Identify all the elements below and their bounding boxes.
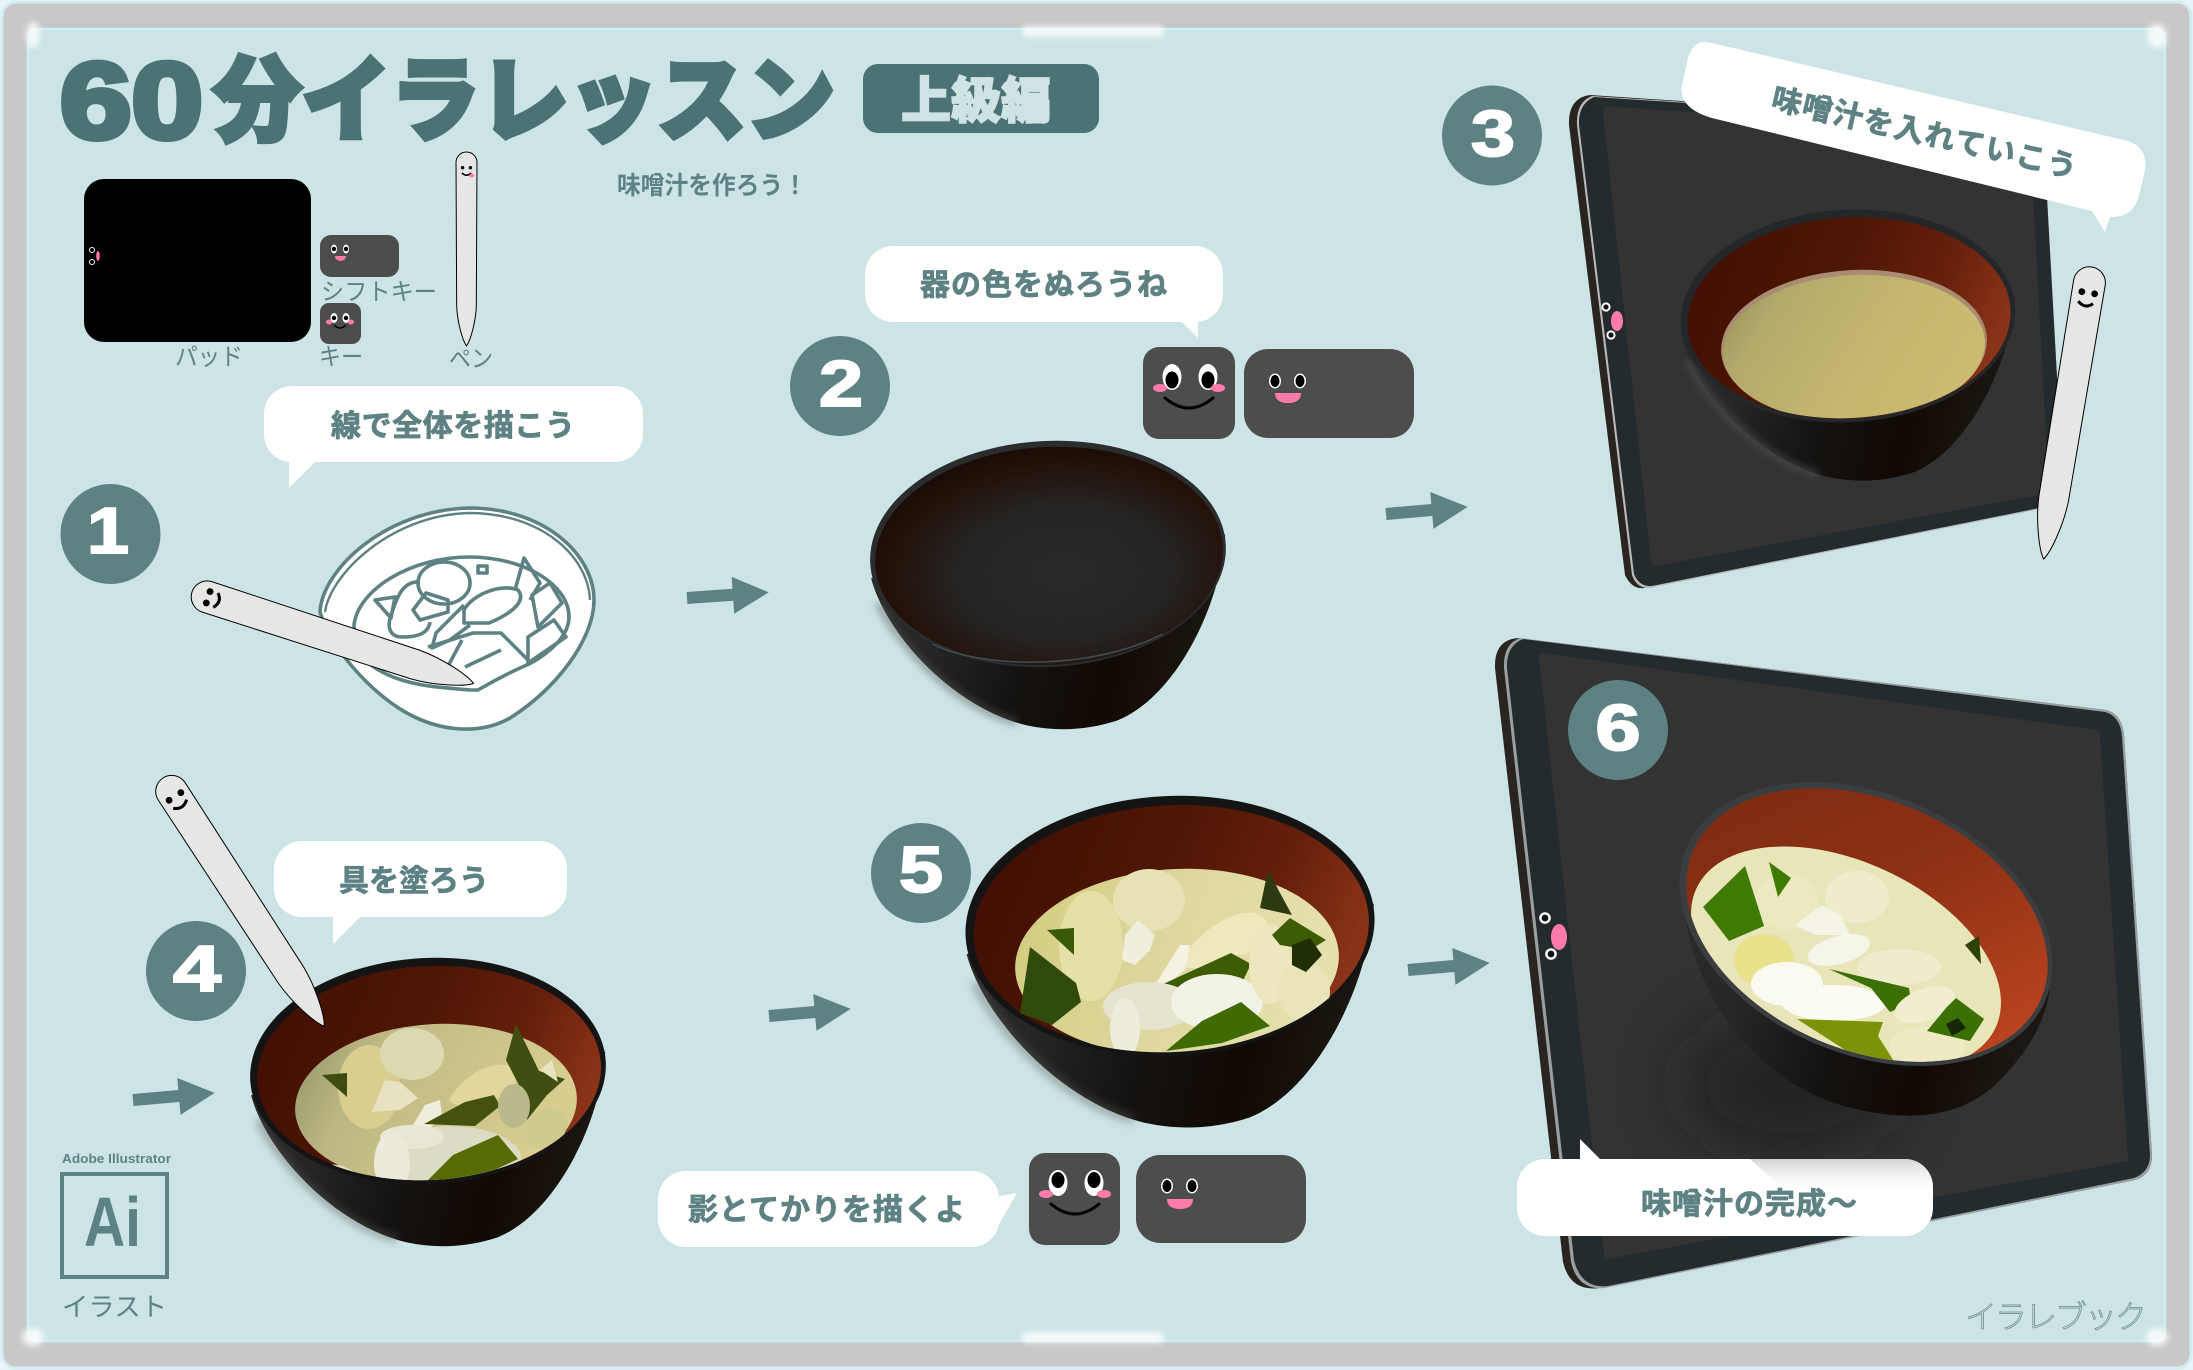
panel: step 4 (146, 769, 852, 1256)
bowl with shading (959, 786, 1385, 1139)
tablet face (1602, 303, 1623, 339)
Adobe Illustrator logo (62, 1151, 171, 1322)
panel: step 6 (1495, 638, 2152, 1288)
step number 3 (1442, 86, 1542, 186)
character legend (84, 152, 493, 373)
panel: step 2 (790, 246, 1469, 739)
logo caption: Adobe Illustrator (62, 1151, 171, 1166)
label: key: キー (319, 344, 363, 371)
title: 60 (60, 40, 203, 161)
speech bubble 6: 味噌汁の完成〜 (1641, 1188, 1857, 1221)
empty black bowl (864, 432, 1235, 739)
label: pad: パッド (175, 344, 243, 371)
tablet (1569, 95, 2064, 588)
icon: pen character (187, 577, 478, 699)
step number 6: 6 (1596, 691, 1640, 764)
badge: 上級編 (863, 64, 1099, 133)
step number 6 (1568, 680, 1668, 780)
step number 1: 1 (87, 494, 129, 567)
speech bubble 3 (1682, 42, 2145, 232)
icon: shift key character (1244, 349, 1414, 438)
speech bubble 5: 影とてかりを描くよ (688, 1194, 965, 1227)
label: shift key: シフトキー (321, 279, 437, 306)
icon: shift key character (1136, 1155, 1306, 1243)
panel: step 5 (658, 786, 1491, 1247)
label: pen: ペン (449, 346, 493, 373)
logo letters: Ai (84, 1183, 141, 1261)
step number 4 (146, 921, 246, 1021)
arrow (767, 991, 852, 1035)
panel: step 3 (131, 42, 2145, 1119)
step number 5 (871, 823, 971, 923)
speech bubble 2 (865, 246, 1223, 338)
title: 分イラレッスン (213, 51, 835, 153)
watermark: イラレブック (1965, 1299, 2147, 1335)
step number 4: 4 (173, 932, 221, 1005)
speech bubble 1 (264, 386, 643, 488)
title (60, 40, 835, 161)
speech bubble 5 (658, 1171, 1017, 1247)
arrow (686, 574, 770, 617)
icon: pen character (150, 769, 338, 1035)
speech bubble 3: 味噌汁を入れていこう (1768, 83, 2080, 185)
badge: 上級編: 上級編 (901, 73, 1051, 129)
speech bubble 6 (1517, 1139, 1933, 1236)
arrow (131, 1075, 216, 1119)
bowl with painted ingredients (244, 949, 615, 1256)
step number 2 (790, 336, 890, 436)
step number 2: 2 (819, 347, 863, 420)
icon: key character (1143, 347, 1235, 439)
tablet face (1540, 913, 1567, 959)
speech bubble 4: 具を塗ろう (339, 865, 489, 898)
icon: key character (1029, 1153, 1120, 1245)
bowl with soup base (1675, 201, 2024, 490)
panel: step 1 (60, 386, 770, 729)
finished bowl (1680, 782, 2052, 1116)
arrow (1384, 489, 1469, 533)
arrow (1406, 945, 1491, 989)
speech bubble 2: 器の色をぬろうね (920, 269, 1167, 302)
speech bubble 4 (274, 841, 567, 944)
icon: key character (320, 303, 361, 344)
subtitle: 味噌汁を作ろう！ (617, 172, 807, 200)
logo box (62, 1174, 167, 1277)
icon: shift key character (320, 235, 399, 277)
icon: pad character (84, 179, 311, 342)
step number 5: 5 (899, 833, 943, 906)
step number 1 (60, 484, 160, 584)
step number 3: 3 (1471, 97, 1515, 170)
icon: pen character (456, 152, 477, 346)
icon: pen character (2028, 264, 2108, 562)
tablet (1495, 638, 2152, 1288)
bowl shadow (1680, 1015, 1900, 1155)
speech bubble 1: 線で全体を描こう (331, 410, 575, 443)
line drawing of miso soup bowl (320, 508, 594, 729)
logo label: イラスト (62, 1292, 167, 1322)
